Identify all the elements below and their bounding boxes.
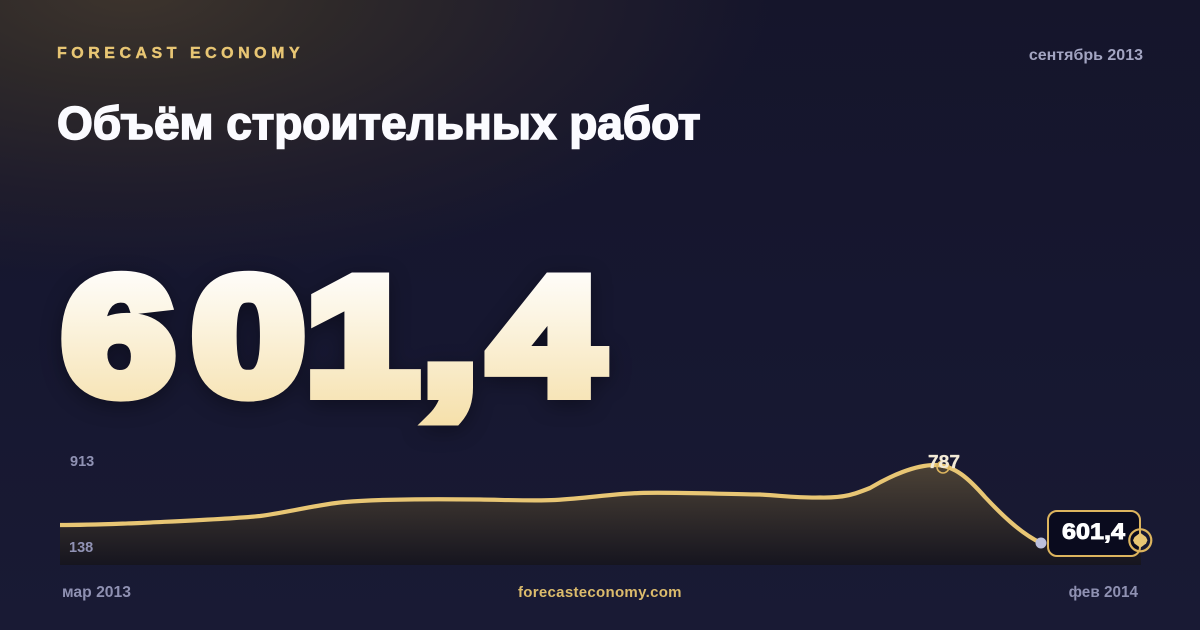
big value: 601,4 <box>62 244 602 429</box>
value callout <box>1048 511 1140 556</box>
area fill <box>60 465 1141 565</box>
axis max: 913 <box>70 454 94 470</box>
value callout: 601,4 <box>1062 519 1126 544</box>
date label: сентябрь 2013 <box>1029 47 1143 64</box>
current marker <box>1129 529 1151 551</box>
axis min: 138 <box>69 540 93 556</box>
website: forecasteconomy.com <box>518 584 682 601</box>
peak value: 787 <box>928 451 960 472</box>
end date: фев 2014 <box>1069 584 1138 601</box>
end point <box>1036 538 1046 548</box>
title: Объём строительных работ <box>57 97 701 149</box>
start date: мар 2013 <box>62 584 131 601</box>
peak marker <box>937 461 949 473</box>
brand label: FORECAST ECONOMY <box>57 45 304 62</box>
trend line <box>60 465 1041 543</box>
